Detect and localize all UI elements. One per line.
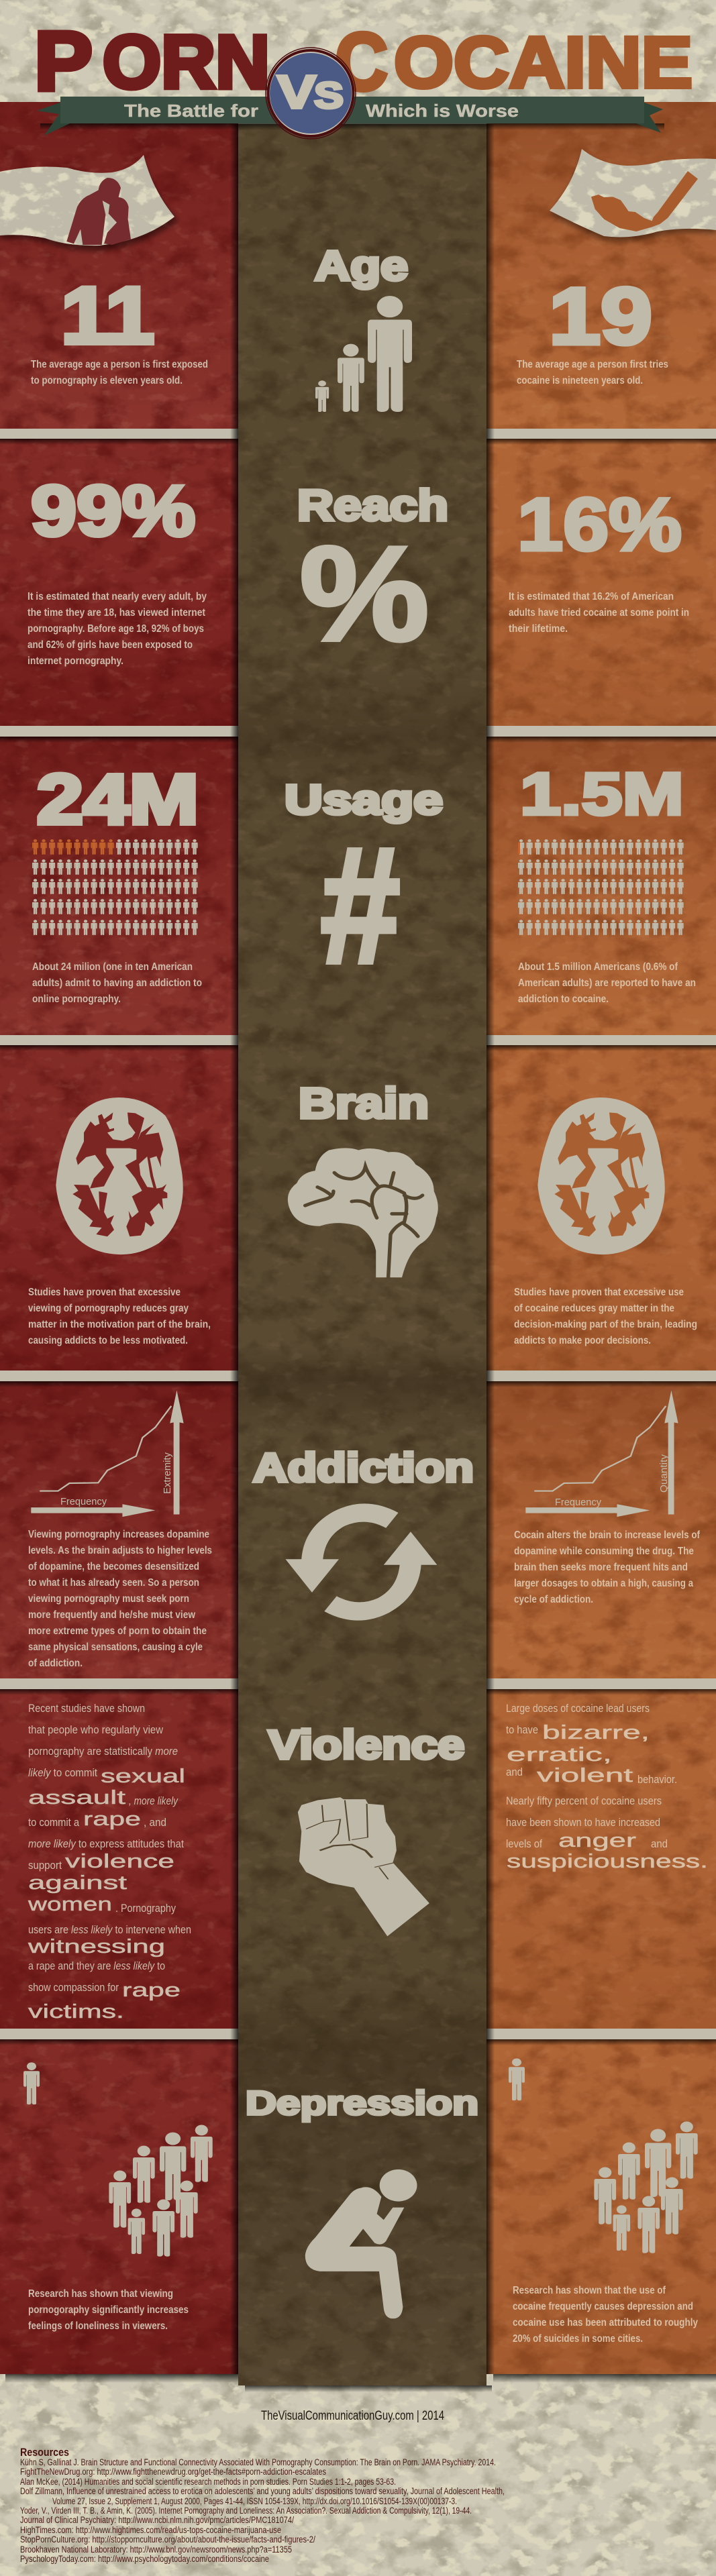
text: addiction porn: more extreme types of porn to obtain the	[28, 1625, 207, 1637]
section: age, center	[315, 243, 412, 412]
chart: frequency vs quantity: Quantity	[658, 1454, 670, 1493]
title	[34, 15, 270, 108]
panel: porn column background	[0, 102, 238, 2374]
text: depression porn: feelings of loneliness in viewers.	[28, 2320, 168, 2332]
section: violence, porn text: support	[28, 1860, 62, 1872]
text: reach cocaine: It is estimated that 16.2% of American	[509, 591, 674, 602]
resources heading: Resources	[20, 2446, 69, 2459]
stat: 11: 11	[61, 271, 154, 361]
text: addiction porn	[28, 1529, 212, 1669]
section: violence, cocaine text: violent	[537, 1765, 633, 1786]
section: violence, cocaine text: suspiciousness.	[507, 1851, 708, 1872]
section: violence, porn text: women	[28, 1894, 112, 1915]
ribbon banner	[37, 97, 664, 136]
section: violence, cocaine text: behavior.	[637, 1774, 677, 1786]
section: reach, center	[297, 480, 448, 669]
section: reach, porn	[28, 470, 207, 667]
section: violence, porn text: witnessing	[27, 1936, 165, 1957]
chart: frequency vs extremity	[31, 1391, 184, 1517]
heading: Usage: Usage	[285, 777, 443, 824]
icon: crowd of people	[109, 2125, 213, 2257]
resources list: Alan McKee, (2014) Humanities and social scientific research methods in porn studies. Porn Studies 1:1-2, pages 53-63.	[20, 2477, 396, 2487]
section: violence, cocaine text: Nearly fifty percent of cocaine users	[506, 1795, 662, 1807]
section: violence, cocaine text: levels of	[506, 1838, 542, 1850]
text: depression porn: Research has shown that viewing	[28, 2288, 173, 2300]
text: age cocaine	[517, 359, 668, 386]
stat: 19: 19	[549, 271, 652, 361]
resources list: FightTheNewDrug.org: http://www.fightthenewdrug.org/get-the-facts#porn-addiction-escalates	[20, 2467, 326, 2477]
panel: cocaine column background	[487, 102, 716, 2374]
text: age porn: The average age a person is first exposed	[31, 359, 208, 370]
section: violence, cocaine text: anger	[558, 1830, 637, 1851]
credit line: TheVisualCommunicationGuy.com | 2014	[261, 2409, 444, 2423]
icon: raised fist	[298, 1797, 429, 1936]
icon: lone person	[23, 2062, 40, 2104]
text: usage porn: online pornography.	[32, 994, 121, 1005]
section: violence, porn text: rape	[122, 1980, 181, 2001]
text: brain cocaine: decision-making part of the brain, leading	[514, 1319, 697, 1330]
text: reach porn: pornography. Before age 18, 92% of boys	[28, 623, 204, 635]
resources list: Brookhaven National Laboratory: http://www.bnl.gov/newsroom/news.php?a=11355	[20, 2544, 292, 2555]
text: brain porn: viewing of pornography reduces gray	[28, 1303, 189, 1314]
section: depression, cocaine	[509, 2058, 525, 2100]
text: brain porn: matter in the motivation part of the brain,	[28, 1319, 211, 1330]
text: reach porn: internet pornography.	[28, 655, 123, 667]
section: age, cocaine	[517, 271, 668, 386]
section: violence, porn text: , and	[144, 1817, 166, 1829]
section: violence, porn text: a rape and they are less likely to	[28, 1960, 165, 1972]
heading: Reach: Reach	[297, 480, 448, 530]
text: reach porn: It is estimated that nearly every adult, by	[28, 591, 207, 602]
section: usage, center	[285, 777, 443, 997]
section: violence, cocaine text: bizarre,	[542, 1722, 650, 1743]
icon: porn flag with couple silhouette	[0, 151, 181, 251]
icon: three people	[315, 296, 412, 412]
section: violence, porn text: assault	[28, 1787, 125, 1809]
title word: PORN: P	[34, 15, 93, 108]
text: addiction porn: of dopamine, the becomes desensitized	[28, 1561, 199, 1572]
section: violence, porn text: victims.	[28, 2001, 124, 2023]
text: usage cocaine	[518, 961, 696, 1005]
panel: center column	[230, 124, 495, 2385]
heading: Addiction: Addiction	[253, 1445, 474, 1491]
text: depression porn	[28, 2288, 189, 2332]
section: depression, center	[246, 2084, 478, 2318]
section: violence, cocaine text: have been shown to have increased	[506, 1817, 660, 1829]
icon: percent sign: %	[300, 519, 429, 669]
text: brain cocaine: of cocaine reduces gray matter in the	[514, 1303, 674, 1314]
chart: frequency vs extremity: Extremity	[162, 1452, 173, 1494]
section: violence, cocaine text: and	[506, 1766, 523, 1778]
heading: Brain: Brain	[299, 1079, 429, 1127]
text: addiction porn: of addiction.	[28, 1658, 83, 1669]
text: addiction cocaine: dopamine while consuming the drug. The	[514, 1546, 694, 1557]
VS badge: S	[314, 74, 344, 116]
heading: Age: Age	[315, 243, 408, 290]
text: addiction cocaine: brain then seeks more frequent hits and	[514, 1562, 688, 1573]
heading: Violence: Violence	[268, 1723, 464, 1767]
title word: COCAINE: C	[335, 16, 388, 107]
stat: 1.5M: 1.5M	[520, 760, 684, 827]
resources list: Dolf Zillmann, Influence of unrestrained access to erotica on adolescents’ and young adults’ dispositions toward sexuality, Journal of Adolescent Health,	[20, 2486, 505, 2496]
section: violence, cocaine text: Large doses of cocaine lead users	[506, 1703, 650, 1715]
text: usage cocaine: About 1.5 million Americans (0.6% of	[518, 961, 678, 973]
text: addiction porn: viewing pornography must seek porn	[28, 1593, 189, 1605]
text: usage cocaine: addiction to cocaine.	[518, 994, 609, 1005]
pictogram: 100 people, 10 highlighted	[32, 839, 198, 935]
text: addiction porn: levels. As the brain adjusts to higher levels	[28, 1545, 212, 1556]
chart: frequency vs extremity: Frequency	[60, 1496, 107, 1507]
text: reach porn: the time they are 18, has viewed internet	[28, 607, 205, 619]
text: brain cocaine: addicts to make poor decisions.	[514, 1335, 651, 1346]
text: addiction porn: more frequently and he/she must view	[28, 1609, 196, 1621]
icon: cycle arrows	[285, 1503, 437, 1621]
section: violence, porn text: more likely to express attitudes that	[28, 1838, 184, 1850]
resources list: Kühn S, Gallinat J. Brain Structure and Functional Connectivity Associated With Pornography Consumption: The Brain on Porn. JAMA Psychiatry. 2014.	[20, 2457, 496, 2467]
section: violence, porn text: Recent studies have shown	[28, 1703, 145, 1715]
ribbon text right: Which is Worse	[366, 101, 519, 121]
resources list: PyschologyToday.com: http://www.psychologytoday.com/conditions/cocaine	[20, 2554, 269, 2564]
text: usage porn: About 24 milion (one in ten American	[32, 961, 193, 973]
section: addiction, cocaine	[514, 1391, 701, 1605]
resources	[20, 2446, 505, 2564]
section: violence, porn text: likely to commit	[28, 1767, 97, 1779]
text: depression cocaine: Research has shown that the use of	[513, 2285, 666, 2296]
icon: brain scan	[56, 1097, 183, 1254]
text: usage cocaine: American adults) are reported to have an	[518, 977, 696, 989]
icon: cocaine flag with spoon	[547, 146, 716, 244]
section: brain, porn	[28, 1097, 211, 1346]
section: violence, porn text: , more likely	[129, 1795, 178, 1807]
stat: 16%: 16%	[517, 483, 682, 566]
section: violence, porn text: show compassion for	[28, 1982, 119, 1994]
title word: PORN	[34, 15, 270, 108]
text: depression porn: pornogoraphy significantly increases	[28, 2304, 189, 2316]
title word: PORN: ORN	[103, 20, 270, 104]
text: addiction cocaine: cycle of addiction.	[514, 1594, 593, 1605]
section: usage, cocaine	[518, 760, 696, 1005]
text: reach cocaine: adults have tried cocaine at some point in	[509, 607, 689, 619]
icon: hash sign: #	[321, 813, 400, 997]
stat: 99%: 99%	[31, 470, 195, 551]
section: addiction, porn	[28, 1391, 212, 1669]
text: addiction porn: to what it has already seen. So a person	[28, 1577, 199, 1589]
text: brain porn	[28, 1287, 211, 1346]
section: violence, cocaine text: erratic,	[507, 1744, 612, 1766]
section: brain, center	[288, 1079, 438, 1277]
pictogram: 100 people	[518, 839, 684, 935]
icon: seated figure with head in hands	[305, 2169, 417, 2318]
text: addiction cocaine: larger dosages to obtain a high, causing a	[514, 1578, 693, 1589]
VS badge: V	[277, 66, 316, 118]
section: violence, porn text: rape	[83, 1809, 141, 1830]
text: age cocaine: The average age a person first tries	[517, 359, 668, 370]
text: age cocaine: cocaine is nineteen years old.	[517, 375, 643, 386]
text: addiction porn: same physical sensations, causing a cyle	[28, 1642, 203, 1653]
text: brain porn: Studies have proven that excessive	[28, 1287, 181, 1298]
section: violence, center	[268, 1723, 464, 1936]
section: violence, porn text	[27, 1703, 191, 2023]
text: reach cocaine	[509, 591, 689, 635]
section: violence, cocaine text: and	[651, 1838, 668, 1850]
section: depression, porn	[23, 2062, 40, 2104]
icon: brain side view	[288, 1148, 438, 1277]
resources list: Yoder, V., Virden III, T. B., & Amin, K. (2005). Internet Pornography and Loneliness: An Association?. Sexual Addiction & Compulsivity, 12(1), 19-44.	[20, 2506, 472, 2516]
section: violence, porn text: that people who regularly view	[28, 1724, 163, 1736]
chart: frequency vs quantity	[525, 1391, 678, 1517]
text: reach porn: and 62% of girls have been exposed to	[28, 639, 193, 651]
text: depression cocaine: 20% of suicides in some cities.	[513, 2333, 643, 2345]
heading: Depression: Depression	[246, 2084, 478, 2122]
section: age, porn	[31, 271, 208, 386]
section: usage, porn	[32, 761, 202, 1005]
icon: lone person	[509, 2058, 525, 2100]
section: violence, porn text: against	[28, 1872, 127, 1894]
section: reach, cocaine	[509, 483, 689, 635]
text: brain cocaine: Studies have proven that excessive use	[514, 1287, 684, 1298]
resources list: Volume 27, Issue 2, Supplement 1, August 2000, Pages 41-44, ISSN 1054-139X, http://dx.doi.org/10.1016/S1054-139X(00)00137-3.	[52, 2496, 457, 2506]
resources list: Journal of Clinical Psychiatry: http://www.ncbi.nlm.nih.gov/pmc/articles/PMC181074/	[20, 2515, 294, 2525]
section: violence, porn text: . Pornography	[115, 1902, 176, 1915]
section: violence, porn text: users are less likely to intervene when	[28, 1924, 191, 1936]
section: violence, cocaine text: to have	[506, 1724, 538, 1736]
resources list	[20, 2457, 505, 2564]
resources list: StopPornCulture.org: http://stoppornculture.org/about/about-the-issue/facts-and-figures-2/	[20, 2534, 315, 2544]
text: age porn: to pornography is eleven years old.	[31, 375, 183, 386]
text: age porn	[31, 359, 208, 386]
icon: crowd of people	[594, 2122, 698, 2253]
text: brain cocaine	[514, 1287, 697, 1346]
text: usage porn	[32, 961, 202, 1005]
text: reach porn	[28, 591, 207, 667]
divider strips between rows	[0, 429, 716, 2392]
text: reach cocaine: their lifetime.	[509, 623, 568, 635]
text: brain porn: causing addicts to be less motivated.	[28, 1335, 188, 1346]
text: depression cocaine	[513, 2285, 698, 2345]
chart: frequency vs quantity: Frequency	[555, 1497, 601, 1508]
text: addiction porn: Viewing pornography increases dopamine	[28, 1529, 209, 1540]
section: brain, cocaine	[514, 1097, 697, 1346]
section: violence, porn text: pornography are statistically more	[28, 1746, 178, 1758]
section: violence, cocaine text	[506, 1703, 708, 1872]
title word: COCAINE: OCAINE	[394, 21, 693, 103]
section: addiction, center	[253, 1445, 474, 1621]
VS badge	[266, 48, 356, 139]
section: violence, porn text: to commit a	[28, 1817, 80, 1829]
stat: 24M: 24M	[37, 761, 199, 839]
ribbon text left: The Battle for	[124, 101, 258, 121]
text: usage porn: adults) admit to having an addiction to	[32, 977, 202, 989]
section: violence, porn text: sexual	[101, 1766, 185, 1787]
icon: brain scan	[538, 1097, 665, 1254]
resources list: HighTimes.com: http://www.hightimes.com/read/us-tops-cocaine-marijuana-use	[20, 2525, 281, 2535]
section: violence, porn text: violence	[65, 1851, 174, 1872]
text: addiction cocaine	[514, 1529, 701, 1605]
